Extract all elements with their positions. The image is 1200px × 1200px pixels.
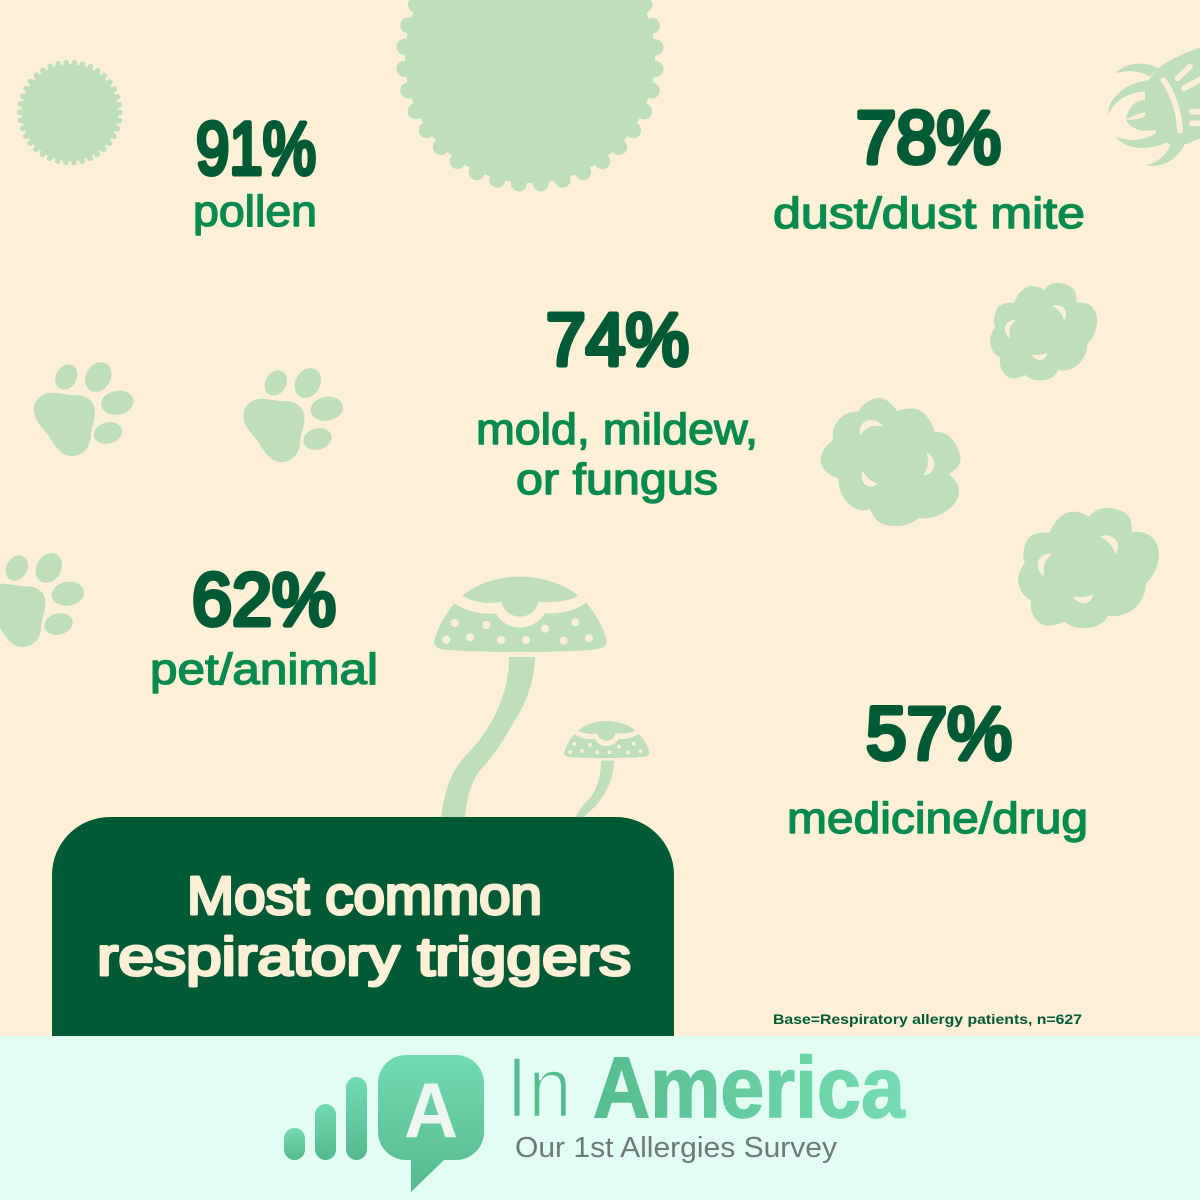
icon: mold cloud middle (821, 398, 961, 526)
icon: paw print 3 (0, 548, 86, 647)
percent: 91%: 91% (196, 107, 316, 190)
stat: medicine/drug (787, 692, 1088, 843)
wordmark: In: In (506, 1040, 572, 1136)
footer band (0, 1036, 1200, 1200)
percent: 74%: 74% (546, 298, 689, 381)
icon: large pollen grain (393, 0, 667, 195)
logo letter A: A (404, 1066, 458, 1154)
stat: pollen (193, 107, 317, 236)
percent: 57%: 57% (866, 692, 1012, 775)
base note: Base=Respiratory allergy patients, n=627 (773, 1011, 1082, 1027)
stat: dust/dust mite (773, 96, 1085, 238)
label: dust/dust mite: dust/dust mite (773, 189, 1085, 238)
icon: paw print 2 (243, 363, 345, 462)
tagline: Our 1st Allergies Survey (515, 1132, 838, 1164)
title line 2: respiratory triggers (97, 927, 631, 987)
icon: small pollen grain (20, 62, 120, 162)
label: medicine/drug: medicine/drug (787, 794, 1088, 843)
icon: small mushroom (564, 721, 649, 818)
icon: mold cloud top right (990, 283, 1097, 380)
logo icon: speech bubble (378, 1055, 484, 1192)
stat: pet/animal (150, 558, 378, 694)
logo icon: signal bars (284, 1077, 367, 1160)
wordmark: America: America (593, 1040, 906, 1136)
percent: 62%: 62% (192, 558, 336, 641)
stat: mold, mildew, or fungus (476, 298, 758, 504)
label: pet/animal: pet/animal (150, 645, 378, 694)
icon: paw print 1 (34, 357, 135, 456)
title line 1: Most common (187, 866, 542, 926)
percent: 78%: 78% (856, 96, 1001, 179)
title panel (52, 817, 674, 1040)
label: pollen: pollen (193, 187, 317, 236)
label: or fungus: or fungus (516, 455, 718, 504)
label: mold, mildew,: mold, mildew, (476, 405, 758, 454)
icon: mold cloud bottom right (1018, 508, 1159, 628)
icon: large mushroom (434, 577, 607, 818)
icon: dust mite (1108, 47, 1200, 166)
